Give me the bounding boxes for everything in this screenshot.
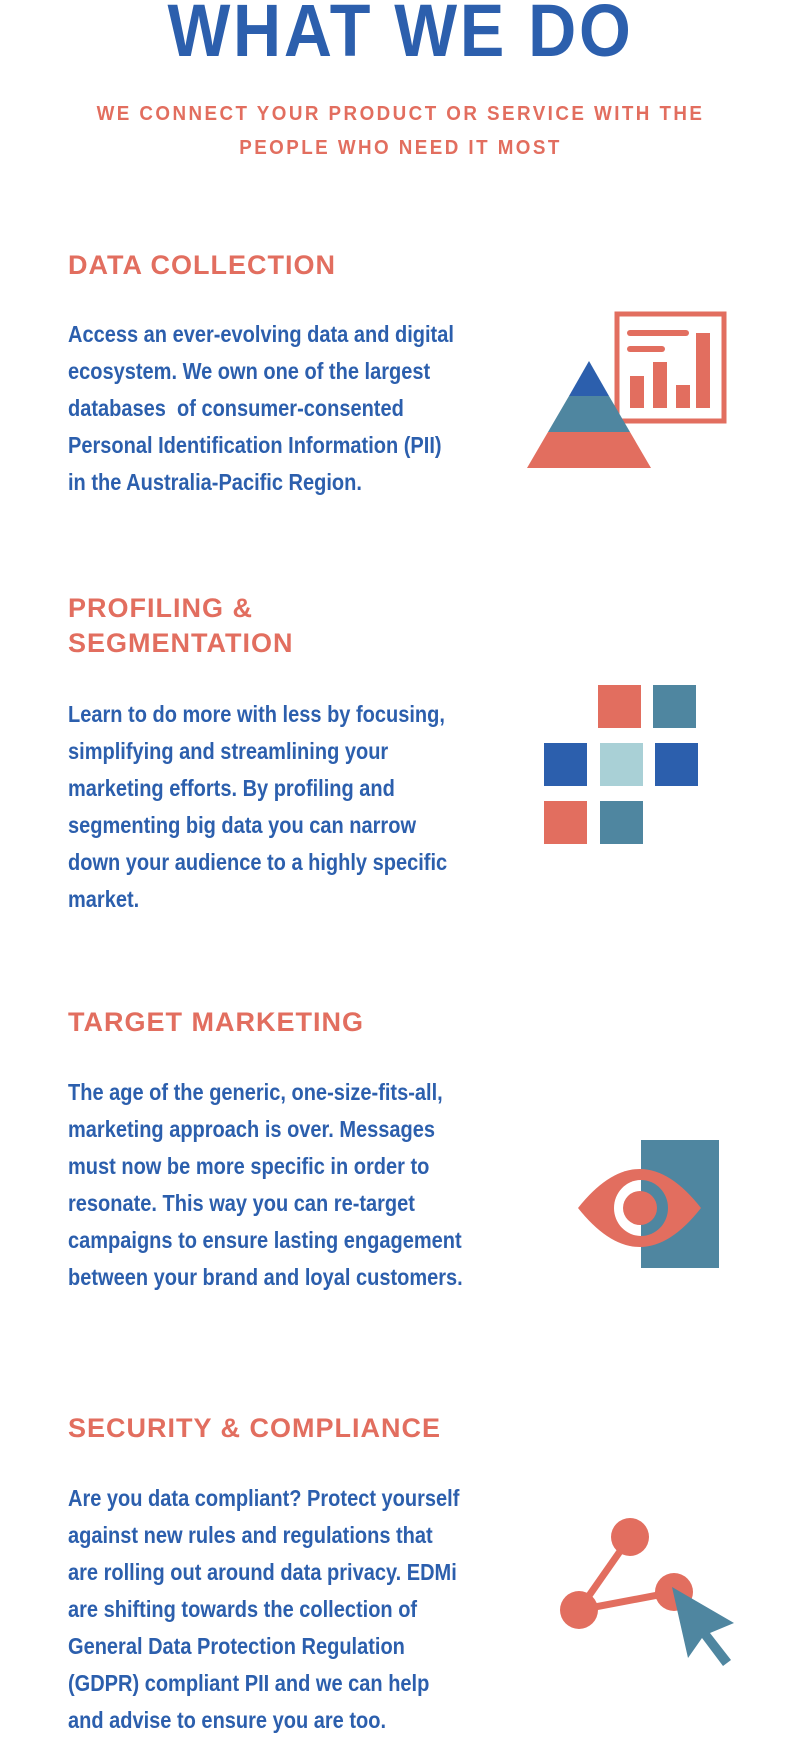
text: security: General Data Protection Regulation: [68, 1633, 405, 1659]
heading: profiling: SEGMENTATION: [68, 628, 294, 658]
text: data collection: Personal Identification Information (PII): [68, 432, 442, 458]
text: data collection: in the Australia-Pacific Region.: [68, 469, 362, 495]
text: target marketing: must now be more specific in order to: [68, 1153, 429, 1179]
subtitle: WE CONNECT YOUR PRODUCT OR SERVICE WITH THE: [97, 103, 704, 125]
text: target marketing: between your brand and loyal customers.: [68, 1264, 463, 1290]
text: profiling: market.: [68, 886, 139, 912]
text: target marketing: resonate. This way you can re-target: [68, 1190, 415, 1216]
heading: profiling: [68, 593, 294, 658]
text: target marketing: campaigns to ensure lasting engagement: [68, 1227, 462, 1253]
text: data collection: ecosystem. We own one of the largest: [68, 358, 430, 384]
text: target marketing: marketing approach is over. Messages: [68, 1116, 435, 1142]
icon: squares grid: [544, 685, 698, 844]
text: security: and advise to ensure you are too.: [68, 1707, 386, 1733]
text: profiling: down your audience to a highly specific: [68, 849, 447, 875]
text: security: against new rules and regulations that: [68, 1522, 433, 1548]
icon: chart and pyramid: [527, 314, 724, 468]
text: security: are rolling out around data privacy. EDMi: [68, 1559, 457, 1585]
text: profiling: Learn to do more with less by focusing,: [68, 701, 445, 727]
text: data collection: databases of consumer-consented: [68, 395, 404, 421]
text: target marketing: [68, 1079, 463, 1290]
text: security: Are you data compliant? Protect yourself: [68, 1485, 459, 1511]
text: security: (GDPR) compliant PII and we can help: [68, 1670, 429, 1696]
text: data collection: Access an ever-evolving data and digital: [68, 321, 454, 347]
heading: security: SECURITY & COMPLIANCE: [68, 1413, 441, 1443]
heading: profiling: PROFILING &: [68, 593, 253, 623]
heading: data collection: DATA COLLECTION: [68, 250, 336, 280]
text: target marketing: The age of the generic, one-size-fits-all,: [68, 1079, 443, 1105]
text: profiling: simplifying and streamlining your: [68, 738, 388, 764]
subtitle: [96, 103, 704, 159]
text: data collection: [68, 321, 454, 495]
text: profiling: marketing efforts. By profiling and: [68, 775, 395, 801]
text: profiling: segmenting big data you can narrow: [68, 812, 416, 838]
icon: network with cursor: [560, 1518, 734, 1666]
heading: target marketing: TARGET MARKETING: [68, 1007, 364, 1037]
text: security: are shifting towards the collection of: [68, 1596, 417, 1622]
icon: eye: [578, 1140, 719, 1268]
text: profiling: [68, 701, 447, 912]
subtitle: PEOPLE WHO NEED IT MOST: [239, 137, 562, 159]
text: security: [68, 1485, 460, 1733]
